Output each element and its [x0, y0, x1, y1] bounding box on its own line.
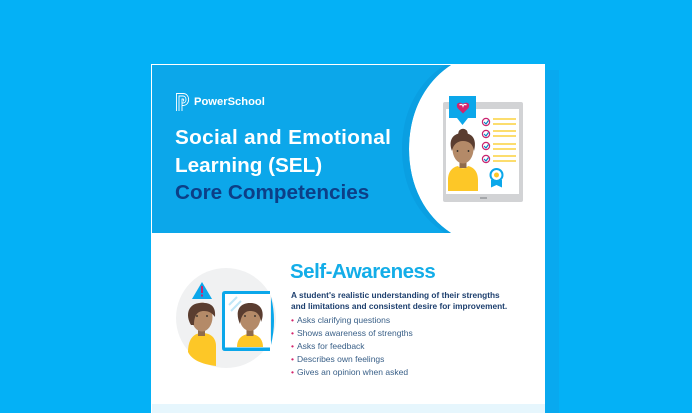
bullet 1: •	[291, 315, 294, 325]
logo	[176, 93, 265, 111]
title: Core Competencies	[175, 181, 369, 204]
bullet 1: Asks clarifying questions	[297, 315, 390, 325]
description: and limitations and consistent desire for improvement.	[291, 301, 507, 311]
title	[175, 126, 391, 204]
bullet 4: Describes own feelings	[297, 354, 384, 364]
bullet 5: •	[291, 367, 294, 377]
infographic page	[151, 64, 545, 413]
bullet 4: •	[291, 354, 294, 364]
title: Social and Emotional	[175, 126, 391, 149]
next section band	[152, 404, 545, 413]
title: Learning (SEL)	[175, 154, 322, 176]
icon: PowerSchool mark	[176, 93, 190, 111]
description	[291, 290, 507, 311]
bullet list	[291, 315, 413, 377]
bullet 5: Gives an opinion when asked	[297, 367, 408, 377]
logo wordmark: PowerSchool	[194, 96, 265, 108]
page shadow	[545, 70, 559, 413]
bullet 3: Asks for feedback	[297, 341, 365, 351]
header band	[152, 65, 545, 233]
description: A student's realistic understanding of their strengths	[291, 290, 500, 300]
bullet 2: Shows awareness of strengths	[297, 328, 413, 338]
bullet 3: •	[291, 341, 294, 351]
heading: Self-Awareness: Self-Awareness	[290, 260, 435, 283]
bullet 2: •	[291, 328, 294, 338]
